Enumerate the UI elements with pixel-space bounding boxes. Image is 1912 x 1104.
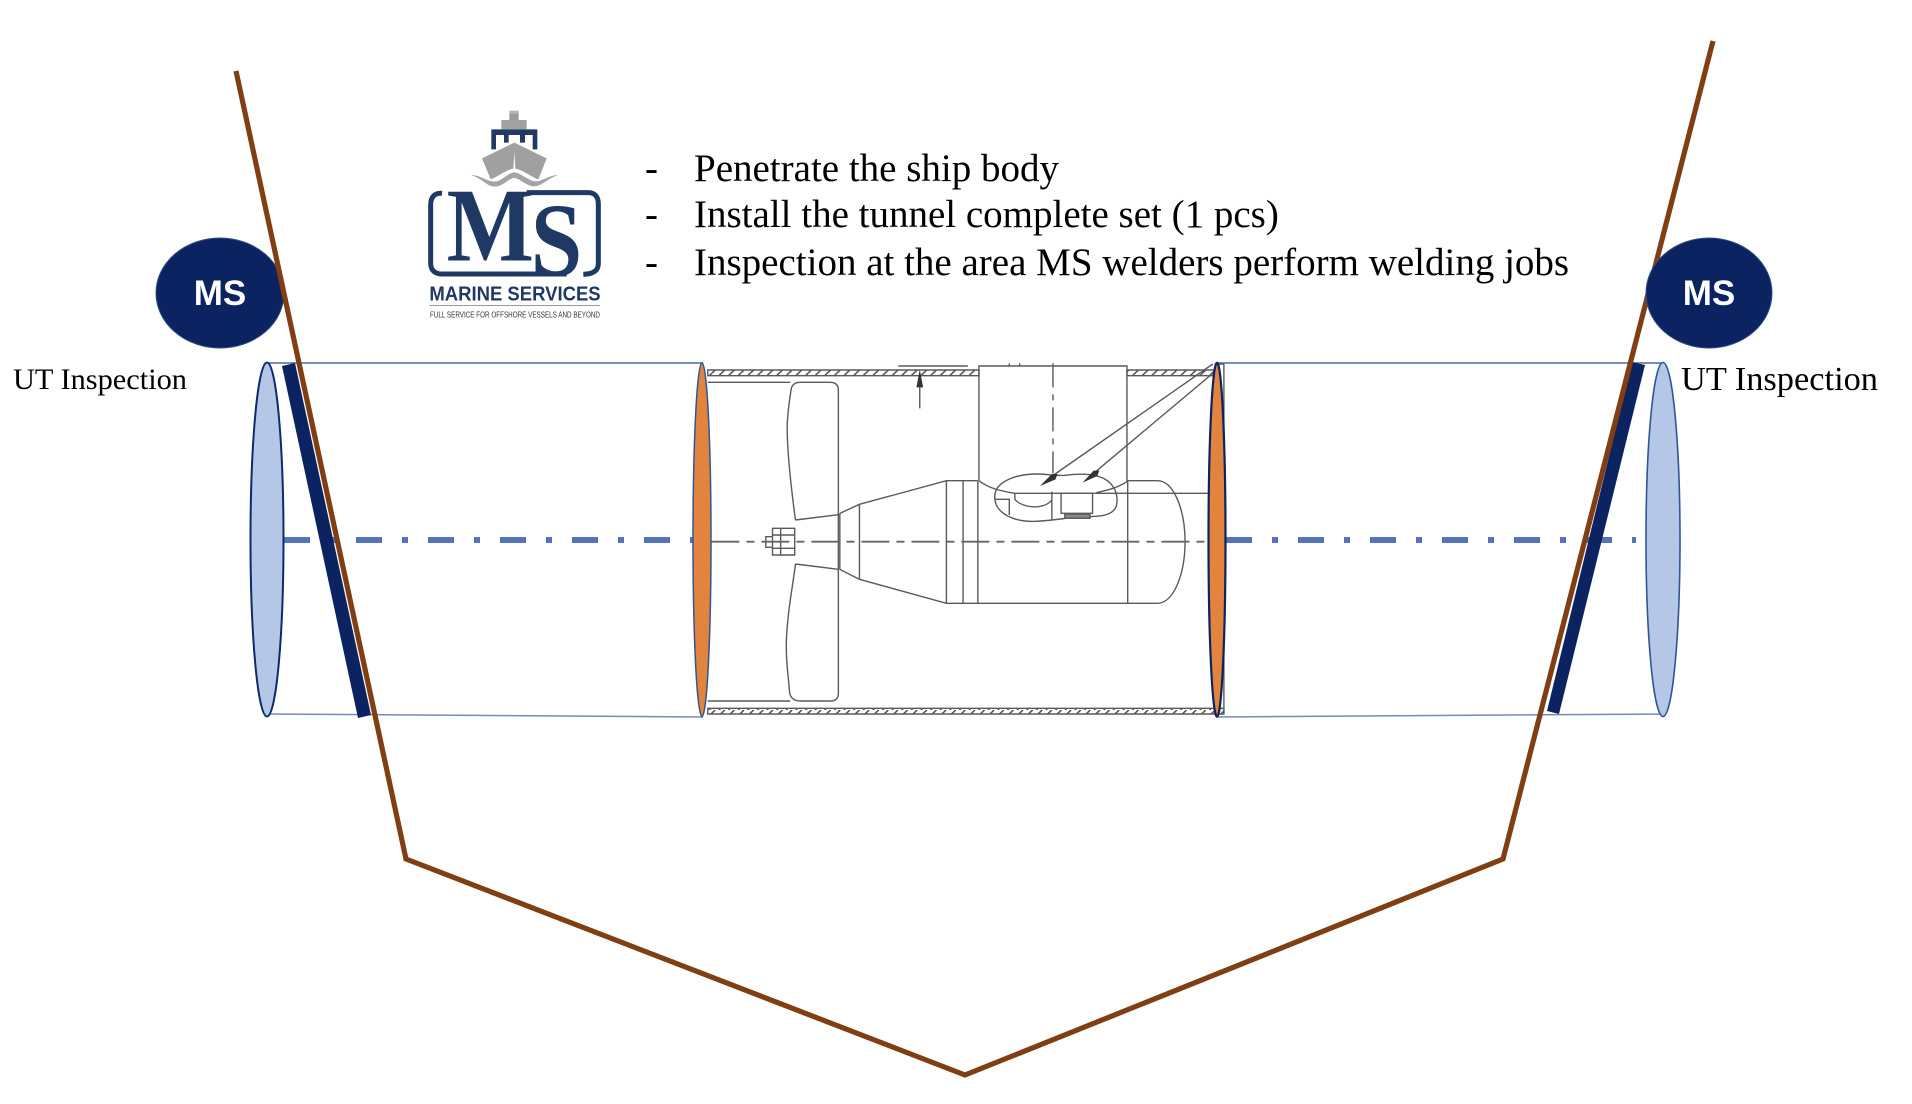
task 3: - (645, 241, 658, 284)
logo: MS Marine Services (429, 111, 601, 319)
right flange (orange) (1208, 363, 1226, 717)
thruster technical drawing (708, 363, 1224, 714)
task 1: Penetrate the ship body (694, 147, 1059, 190)
MS badge right: MS (1683, 274, 1735, 313)
right weld plate (1547, 362, 1645, 714)
ship hull outline (236, 41, 1713, 1075)
thruster center line (711, 541, 1209, 543)
MS badge left (156, 238, 284, 348)
left flange (orange) (693, 363, 711, 717)
propeller (766, 382, 838, 701)
tunnel wall hatching (708, 364, 1224, 714)
logo letter M: M (447, 168, 534, 284)
label: UT inspection left: UT Inspection (13, 363, 187, 396)
logo letter S: S (531, 181, 582, 298)
logo frame (431, 193, 598, 274)
tunnel tube: left section (267, 363, 703, 717)
left weld plate (282, 363, 371, 718)
strut housing (979, 363, 1209, 493)
gearbox body (840, 481, 1185, 603)
detail cutout (994, 474, 1117, 521)
task 2: - (645, 193, 658, 236)
MS badge left: MS (194, 274, 246, 313)
logo ship icon (471, 111, 558, 187)
dimension arrow (898, 366, 968, 408)
task 1: - (645, 147, 658, 190)
logo wordmark: MARINE SERVICES (429, 283, 601, 306)
center line: left dash-dot (284, 537, 696, 543)
MS badge right (1646, 238, 1772, 348)
pointer arrows (1040, 364, 1213, 486)
right UT inspection disc (1646, 362, 1680, 716)
task 2: Install the tunnel complete set (1 pcs) (694, 193, 1279, 236)
label: UT inspection right: UT Inspection (1681, 361, 1878, 398)
left UT inspection disc (250, 362, 284, 716)
logo tagline: FULL SERVICE FOR OFFSHORE VESSELS AND BEYOND (430, 309, 600, 319)
tunnel tube: right section (1217, 363, 1663, 717)
center line: right dash-dot (1226, 537, 1636, 543)
task list (645, 147, 1569, 284)
task 3: Inspection at the area MS welders perform welding jobs (694, 241, 1569, 284)
